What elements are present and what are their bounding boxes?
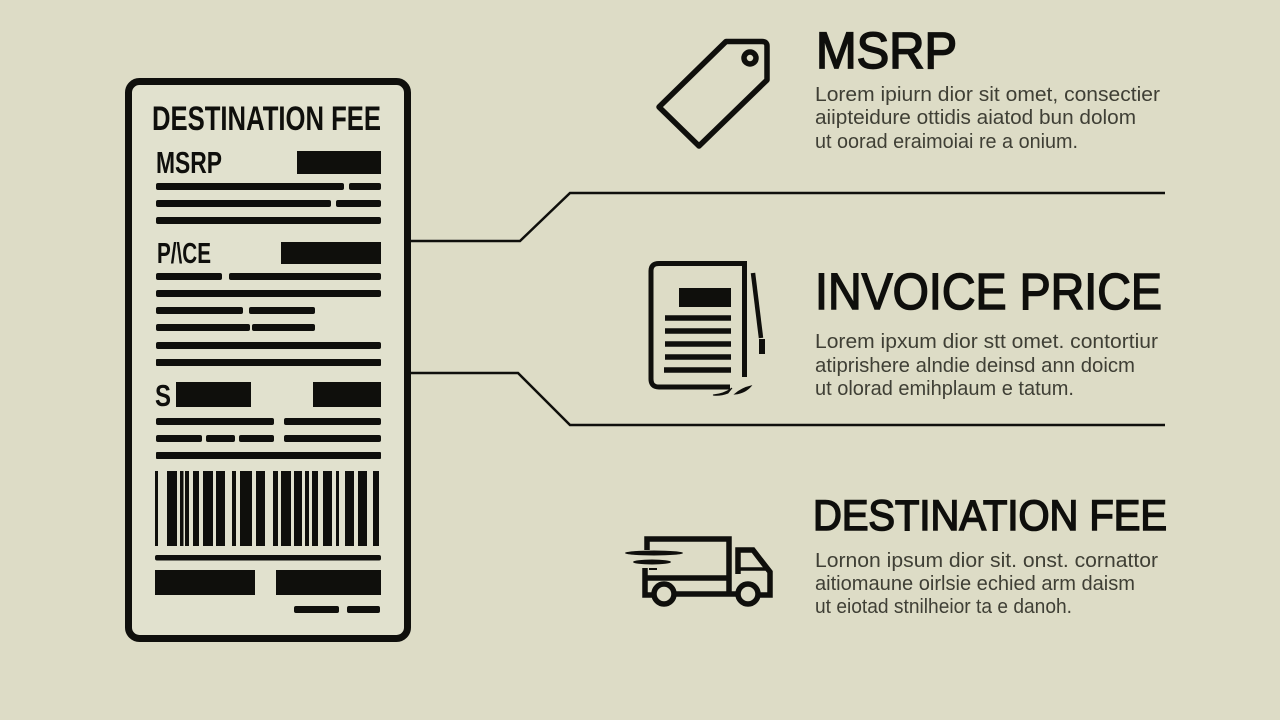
body text: MSRP (815, 84, 1160, 153)
body text: destination fee: aitiomaune oirlsie echied arm daism (815, 573, 1135, 595)
receipt frame (128, 82, 408, 638)
receipt footer (155, 555, 381, 613)
section: price row: P/\CE (157, 238, 211, 270)
heading: MSRP: MSRP (816, 22, 957, 79)
heading: destination fee: DESTINATION FEE (813, 492, 1167, 540)
body text: invoice price: atiprishere alndie deinsd ann doicm (815, 355, 1135, 377)
section: MSRP row: MSRP (156, 145, 222, 180)
icon: invoice document (651, 264, 762, 395)
barcode (155, 471, 379, 546)
body text: MSRP: aiipteidure ottidis aiatod bun dolom (815, 107, 1136, 129)
body text: destination fee: Lornon ipsum dior sit. onst. cornattor (815, 550, 1158, 572)
body text: destination fee (815, 550, 1158, 618)
section: destination fee text (813, 492, 1167, 618)
section: invoice price text (815, 263, 1162, 400)
section: MSRP text (815, 22, 1160, 153)
icon: price tag (659, 42, 767, 146)
heading: invoice price: INVOICE PRICE (815, 263, 1162, 320)
body text: destination fee: ut eiotad stnilheior ta e danoh. (815, 596, 1072, 618)
section: price row (156, 238, 381, 366)
icon: delivery truck (625, 539, 770, 604)
section: dollar row (155, 378, 381, 459)
receipt title: DESTINATION FEE (152, 100, 381, 138)
body text: MSRP: ut oorad eraimoiai re a onium. (815, 131, 1078, 153)
body text: MSRP: Lorem ipiurn dior sit omet, consectier (815, 84, 1160, 106)
body text: invoice price: ut olorad emihplaum e tatum. (815, 378, 1074, 400)
connector: bottom line from receipt (411, 373, 1165, 425)
section: MSRP row (156, 145, 381, 224)
panel: receipt (128, 82, 408, 638)
section: dollar row: S (155, 378, 171, 413)
connector: top line to invoice section (411, 193, 1165, 241)
body text: invoice price (815, 331, 1158, 400)
body text: invoice price: Lorem ipxum dior stt omet. contortiur (815, 331, 1158, 353)
